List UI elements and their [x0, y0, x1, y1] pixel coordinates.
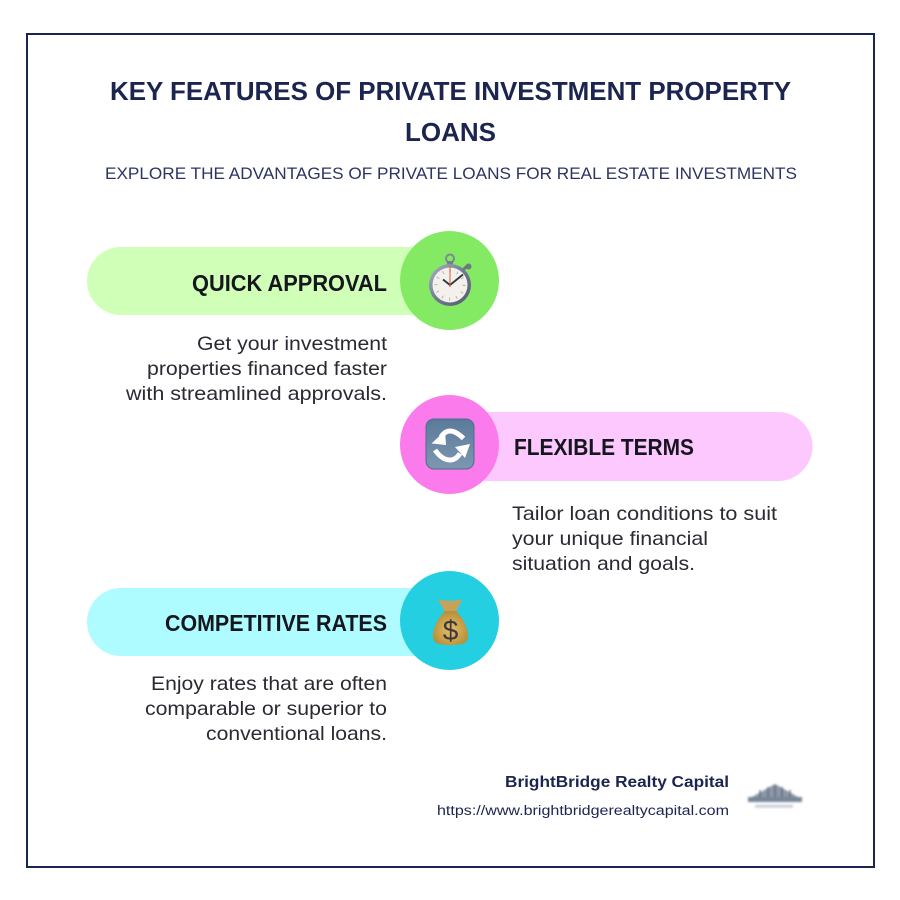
icon: company logo [748, 784, 802, 808]
heading: quick approval: QUICK APPROVAL [192, 270, 387, 296]
title [110, 76, 791, 147]
subtitle: EXPLORE THE ADVANTAGES OF PRIVATE LOANS FOR REAL ESTATE INVESTMENTS [105, 164, 797, 183]
icon: stopwatch [429, 254, 472, 306]
icon circle: cyan [400, 571, 499, 670]
panel: quick approval [87, 231, 499, 405]
body text: competitive rates: Enjoy rates that are often [151, 673, 387, 695]
body text: competitive rates: conventional loans. [206, 723, 387, 745]
icon: money bag: $ [443, 615, 459, 646]
panel: competitive rates [87, 571, 499, 745]
title: LOANS [405, 117, 496, 147]
body text: quick approval: properties financed faster [147, 358, 388, 380]
pill: quick approval [87, 247, 450, 315]
heading: flexible terms: FLEXIBLE TERMS [514, 434, 694, 460]
body text: flexible terms: your unique financial [512, 528, 708, 550]
icon: money bag [433, 599, 468, 646]
icon: refresh arrows [426, 419, 474, 469]
pill: flexible terms [450, 412, 813, 481]
pill: competitive rates [87, 588, 450, 656]
body text: quick approval: Get your investment [197, 333, 388, 355]
brand name: BrightBridge Realty Capital [505, 774, 729, 791]
website url: https://www.brightbridgerealtycapital.com [437, 803, 729, 818]
body text: flexible terms: situation and goals. [512, 553, 695, 575]
icon circle: green [400, 231, 499, 330]
title: KEY FEATURES OF PRIVATE INVESTMENT PROPERTY [110, 76, 791, 106]
body text: flexible terms: Tailor loan conditions to suit [512, 503, 778, 525]
body text: competitive rates: comparable or superior to [145, 698, 387, 720]
icon circle: pink [400, 395, 499, 494]
body text: quick approval: with streamlined approvals. [125, 383, 387, 405]
heading: competitive rates: COMPETITIVE RATES [165, 610, 387, 636]
panel: flexible terms [400, 395, 813, 575]
